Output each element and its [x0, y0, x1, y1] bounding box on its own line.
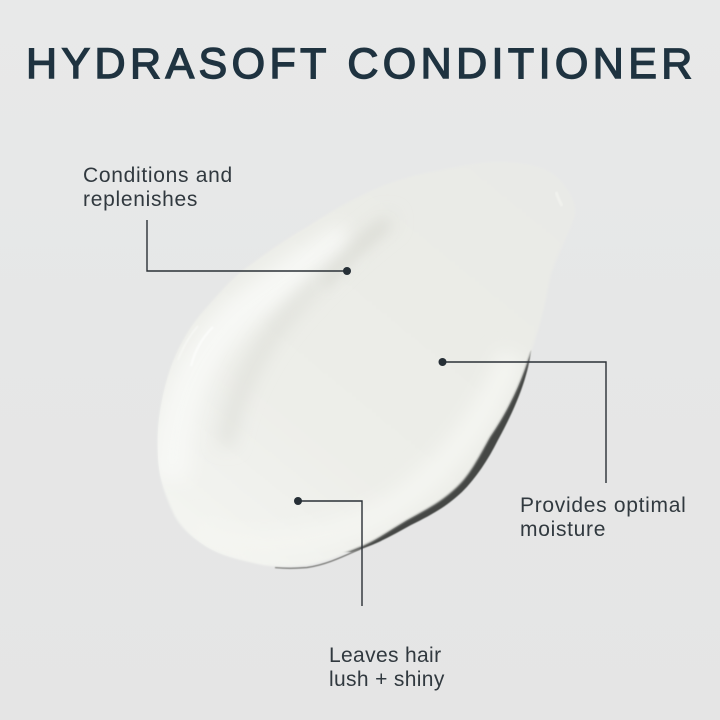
cream swatch — [158, 193, 562, 568]
label: conditions: replenishes — [83, 188, 198, 211]
title: HYDRASOFT CONDITIONER — [26, 40, 697, 88]
label: shiny — [329, 644, 445, 691]
cream swatch and callout lines — [146, 193, 607, 606]
callout line: moisture — [438, 358, 606, 483]
label: moisture — [520, 494, 686, 541]
label: shiny: Leaves hair — [329, 644, 441, 667]
callout line: conditions — [147, 220, 351, 275]
label: conditions: Conditions and — [83, 164, 233, 187]
label: conditions — [83, 164, 233, 211]
label: moisture: moisture — [520, 518, 606, 541]
cream shadow — [275, 350, 531, 568]
label: moisture: Provides optimal — [520, 494, 686, 517]
label: shiny: lush + shiny — [329, 668, 445, 691]
callout line: shiny — [294, 497, 362, 606]
